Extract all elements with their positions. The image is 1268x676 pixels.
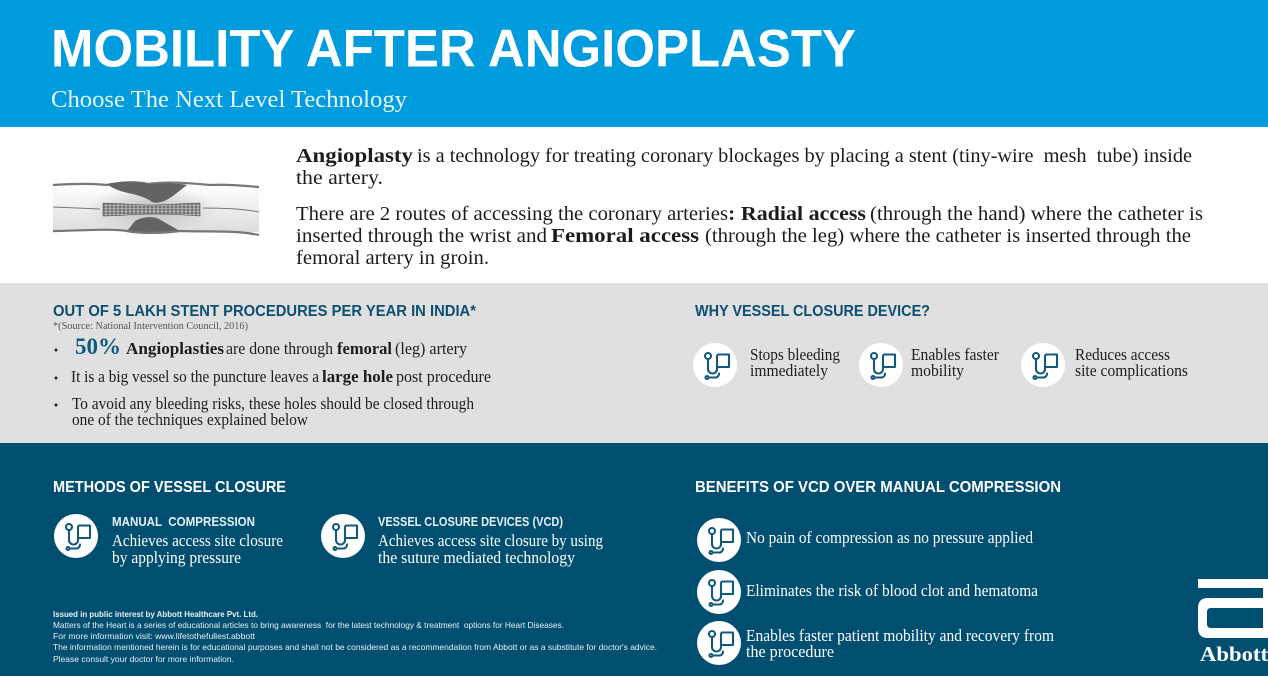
- bullet: 50 percent: femoral: [337, 339, 392, 358]
- icon: stethoscope, manual compression: [54, 514, 98, 558]
- bullet: big vessel: post procedure: [396, 367, 491, 386]
- icon: stethoscope, stops bleeding: [693, 343, 737, 387]
- benefit: faster recovery: [746, 626, 1054, 661]
- bullet: bleeding risks: To avoid any bleeding risks, these holes should be closed through: [72, 394, 475, 413]
- benefit: faster recovery: Enables faster patient mobility and recovery from: [746, 626, 1054, 645]
- bullet: big vessel: [54, 367, 491, 386]
- method: manual compression: MANUAL COMPRESSION: [112, 515, 255, 529]
- footer disclaimer: The information mentioned herein is for educational purposes and shall not be considered as a recommendation from Abbott or as a substitute for doctor's advice.: [53, 643, 657, 652]
- icon: stethoscope, vessel closure devices: [321, 514, 365, 558]
- heading: why vessel closure device: WHY VESSEL CLOSURE DEVICE?: [695, 303, 930, 320]
- text: faster mobility: [911, 345, 999, 380]
- intro text: access routes: inserted through the wrist and: [296, 225, 547, 247]
- logo: Abbott: [1198, 579, 1268, 666]
- footer disclaimer: [53, 610, 657, 664]
- icon: stethoscope, benefit three: [697, 621, 741, 665]
- intro text: angioplasty: [296, 145, 1192, 189]
- footer disclaimer: Matters of the Heart is a series of educational articles to bring awareness for the latest technology & treatment options for Heart Diseases.: [53, 621, 564, 630]
- intro text: angioplasty: is a technology for treating coronary blockages by placing a stent (tiny-wire mesh tube) inside: [417, 145, 1192, 167]
- footer disclaimer: Issued in public interest by Abbott Healthcare Pvt. Ltd.: [53, 610, 258, 619]
- method: manual compression: [112, 515, 283, 567]
- intro text: access routes: (through the leg) where the catheter is inserted through the: [705, 225, 1191, 247]
- footer disclaimer: Please consult your doctor for more information.: [53, 655, 234, 664]
- method: manual compression: by applying pressure: [112, 548, 241, 567]
- method: vessel closure devices: the suture mediated technology: [378, 548, 576, 567]
- subtitle: Choose The Next Level Technology: [51, 87, 407, 113]
- bullet: 50 percent: 50%: [75, 334, 121, 359]
- icon: stethoscope, complications: [1021, 343, 1065, 387]
- panel: dark methods and benefits band: [0, 443, 1268, 676]
- method: vessel closure devices: Achieves access site closure by using: [378, 531, 603, 550]
- text: stops bleeding: Stops bleeding: [750, 345, 840, 364]
- header band: [0, 0, 1268, 127]
- method: vessel closure devices: [378, 515, 603, 567]
- panel: grey statistics band: [0, 283, 1268, 443]
- benefit: faster recovery: the procedure: [746, 642, 834, 661]
- benefit: no pain: No pain of compression as no pressure applied: [746, 528, 1034, 547]
- text: stops bleeding: immediately: [750, 361, 829, 380]
- heading: stent procedures: OUT OF 5 LAKH STENT PROCEDURES PER YEAR IN INDIA*: [53, 303, 477, 320]
- intro text: access routes: femoral artery in groin.: [296, 247, 489, 269]
- text: stops bleeding: [750, 345, 840, 380]
- text: reduces complications: Reduces access: [1075, 345, 1170, 364]
- method: manual compression: Achieves access site closure: [112, 531, 283, 550]
- intro text: access routes: [296, 203, 1203, 269]
- text: reduces complications: [1075, 345, 1188, 380]
- method: vessel closure devices: VESSEL CLOSURE DEVICES (VCD): [378, 515, 563, 529]
- bullet: 50 percent: [54, 334, 468, 359]
- bullet: big vessel: It is a big vessel so the puncture leaves a: [71, 367, 320, 386]
- benefit: eliminates risk: Eliminates the risk of blood clot and hematoma: [746, 581, 1039, 600]
- intro text: access routes: Femoral access: [551, 225, 699, 247]
- icon: stethoscope, faster mobility: [859, 343, 903, 387]
- bullet: 50 percent: (leg) artery: [395, 339, 468, 358]
- illustration: stent in artery: [53, 182, 259, 235]
- bullet: 50 percent: are done through: [226, 339, 334, 358]
- intro text: access routes: : Radial access: [728, 203, 866, 225]
- source note: *(Source: National Intervention Council, 2016): [53, 321, 248, 332]
- text: faster mobility: Enables faster: [911, 345, 999, 364]
- intro text: access routes: (through the hand) where the catheter is: [870, 203, 1203, 225]
- bullet: bleeding risks: one of the techniques explained below: [72, 410, 308, 429]
- title: MOBILITY AFTER ANGIOPLASTY: [51, 20, 856, 78]
- intro text: angioplasty: the artery.: [296, 167, 383, 189]
- icon: stethoscope, benefit one: [697, 518, 741, 562]
- intro text: access routes: There are 2 routes of accessing the coronary arteries: [296, 203, 728, 225]
- heading: methods of vessel closure: METHODS OF VESSEL CLOSURE: [53, 479, 286, 496]
- bullet: bleeding risks: [54, 394, 475, 429]
- text: faster mobility: mobility: [911, 361, 965, 380]
- logo: Abbott: Abbott: [1200, 642, 1268, 666]
- icon: stethoscope, benefit two: [697, 570, 741, 614]
- footer disclaimer: For more information visit: www.lifetothefullest.abbott: [53, 632, 256, 641]
- intro text: angioplasty: Angioplasty: [296, 145, 413, 167]
- text: reduces complications: site complications: [1075, 361, 1188, 380]
- heading: benefits: BENEFITS OF VCD OVER MANUAL COMPRESSION: [695, 479, 1061, 496]
- bullet: big vessel: large hole: [322, 367, 393, 386]
- bullet: 50 percent: Angioplasties: [126, 339, 225, 358]
